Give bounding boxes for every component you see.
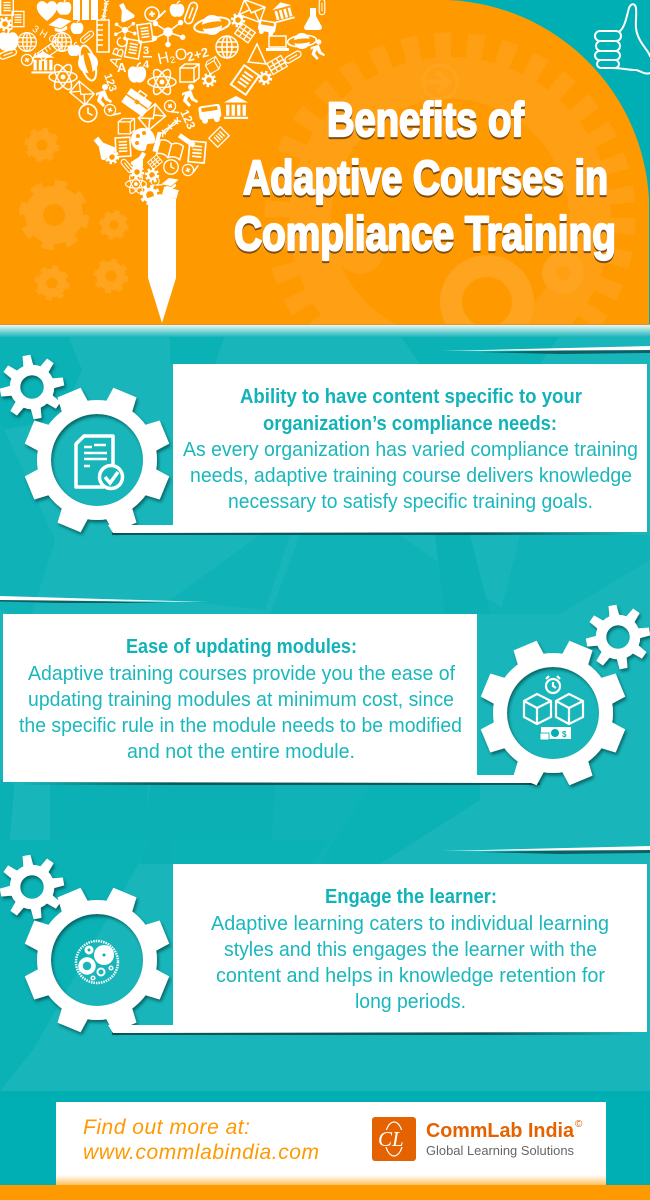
text: panel 1: Ability to have content specific to your [240,386,582,408]
icon: funnel of learning icons: A [117,60,127,75]
icon: funnel of learning icons [0,0,325,203]
text: panel 3 [211,886,609,1013]
text: panel 2: updating training modules at minimum cost, since [28,689,454,711]
text: panel 2 [19,636,462,763]
text: panel 2: Adaptive training courses provide you the ease of [28,663,455,685]
logo: CommLab India [372,1117,583,1161]
icon: document with check [76,436,122,488]
footer [0,1102,650,1200]
text: panel 3: Engage the learner: [325,886,497,908]
logo: CommLab India: Global Learning Solutions [426,1144,574,1158]
text: panel 3: content and helps in knowledge retention for [216,965,605,987]
icon: boxes, clock and money: $ [562,730,567,739]
icon: funnel of learning icons: 123 [101,72,119,93]
text: panel 3: long periods. [355,991,466,1013]
text: panel 1: organization’s compliance needs: [263,413,557,435]
icon: circle of cogs [76,941,118,983]
logo: CommLab India: CommLab India [426,1120,575,1142]
text: panel 1: necessary to satisfy specific training goals. [228,491,593,513]
text: panel 3: Adaptive learning caters to individual learning [211,913,609,935]
icon: funnel of learning icons: 3 [143,45,149,57]
text: panel 1 [183,386,638,513]
icon: funnel of learning icons: 4 [143,59,150,71]
icon: boxes, clock and money [524,676,583,740]
panel 3: engage the learner [0,846,650,1035]
text: panel 2: Ease of updating modules: [126,636,357,658]
icon: funnel of learning icons: ABC [106,34,132,69]
gear 2 large [480,605,650,786]
text: panel 3: styles and this engages the learner with the [224,939,597,961]
logo: CommLab India: © [575,1119,583,1130]
gear 3 large [0,855,170,1033]
footer link text: Find out more at: [83,1116,250,1139]
text: panel 1: needs, adaptive training course delivers knowledge [190,465,632,487]
gear 1 large [0,355,170,533]
panel 1: content specific [0,346,650,535]
header: orange banner with arc [0,0,649,324]
icon: funnel of learning icons: 3 H O [30,24,58,46]
panel 2: ease of updating [0,596,650,786]
footer link text: www.commlabindia.com [83,1141,319,1164]
text: panel 2: and not the entire module. [127,741,355,763]
title: Benefits of [327,94,525,147]
text: panel 1: As every organization has varied compliance training [183,439,638,461]
icon: funnel of learning icons: 2+2 [185,44,210,65]
title [234,94,616,261]
icon: funnel of learning icons: H₂O [156,46,189,68]
footer link text [83,1116,319,1164]
text: panel 2: the specific rule in the module needs to be modified [19,715,462,737]
icon: funnel of learning icons: 123 [177,107,199,132]
logo: CommLab India: CL [378,1127,404,1151]
icon: white pencil [148,194,176,323]
divider band [0,324,650,337]
icon: thumbs up [595,4,650,74]
